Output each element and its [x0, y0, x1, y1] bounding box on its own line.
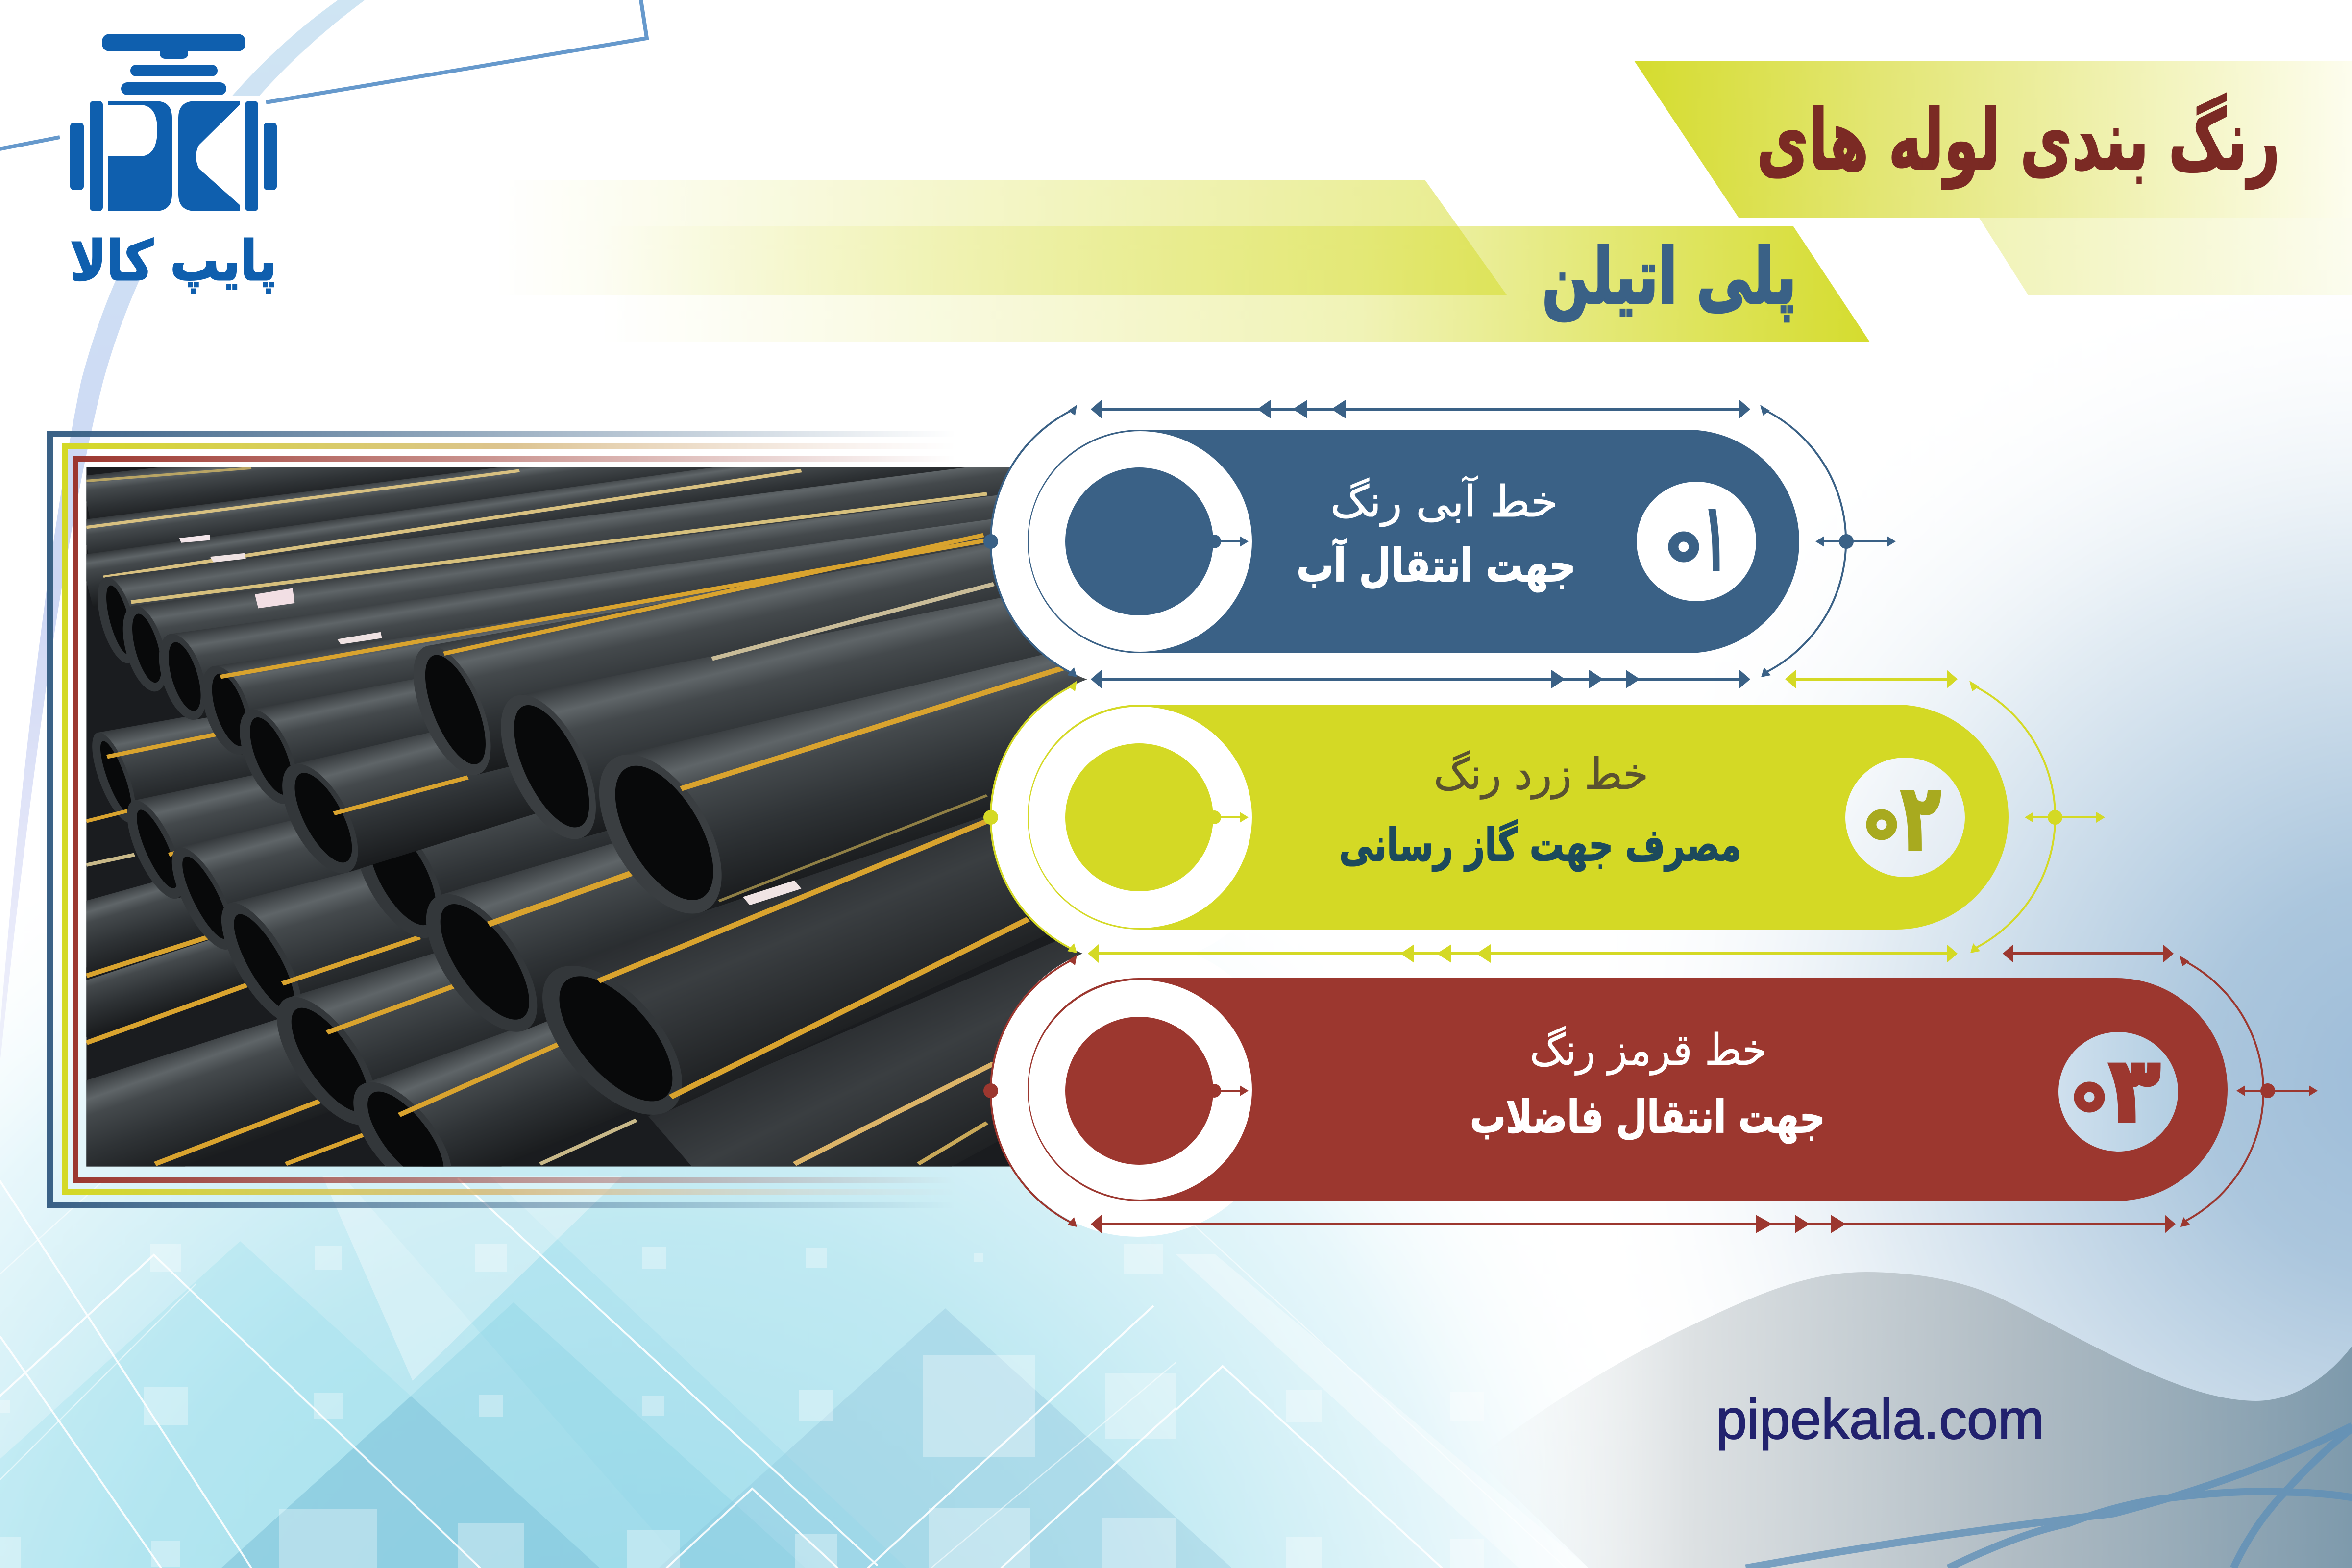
arcs and arrows: [983, 944, 2318, 1233]
pipe capsule: [1028, 978, 2228, 1201]
pipe capsule: [1028, 705, 2009, 930]
header ribbon: second: [600, 226, 1870, 342]
text: description: جهت انتقال فاضلاب: [1470, 1091, 1825, 1144]
text: heading: خط زرد رنگ: [1434, 749, 1648, 799]
header ribbon: top right back: [1929, 138, 2352, 295]
number badge: [1845, 758, 1965, 877]
arcs and arrows: [983, 400, 1896, 688]
text: description: مصرف جهت گاز رسانی: [1339, 819, 1741, 872]
photo: black polyethylene pipes with yellow stripes: [86, 467, 1087, 1167]
number digit: ۳: [2108, 1037, 2160, 1143]
background hill: [1476, 1272, 2352, 1568]
number zero: ۰: [1856, 770, 1908, 870]
number digit: ۲: [1901, 765, 1941, 871]
number badge: [2058, 1032, 2178, 1152]
title line 2: پلی اتیلن: [1542, 232, 1796, 321]
text: heading: خط آبی رنگ: [1330, 476, 1558, 527]
photo frames: [50, 434, 956, 1205]
header ribbon: top right: [1634, 61, 2352, 218]
logo wordmark: پایپ کالا: [70, 229, 277, 294]
pipe capsule: [1028, 430, 1799, 653]
number zero: ۰: [1658, 492, 1710, 592]
number badge: [1637, 482, 1756, 601]
decorative frame line: [0, 0, 647, 149]
number zero: ۰: [2063, 1043, 2115, 1142]
text: description: جهت انتقال آب: [1297, 538, 1576, 592]
panel 1: blue line: [983, 400, 1896, 688]
number zero ring: [1871, 814, 1892, 835]
arcs and arrows: [983, 670, 2105, 963]
decorative swoosh band: [0, 0, 365, 1063]
panel 3: red line: [983, 944, 2318, 1233]
website url: pipekala.com: [1716, 1389, 2044, 1451]
number zero ring: [1673, 537, 1694, 557]
background curved lines: [1746, 1426, 2352, 1568]
panel 2: yellow line: [983, 670, 2105, 963]
panel 1: blue line: ۱: [1704, 483, 1725, 592]
logo: [70, 34, 277, 294]
text: heading: خط قرمز رنگ: [1530, 1025, 1767, 1076]
header ribbon: long back: [495, 180, 1507, 295]
number zero ring: [2079, 1087, 2100, 1107]
